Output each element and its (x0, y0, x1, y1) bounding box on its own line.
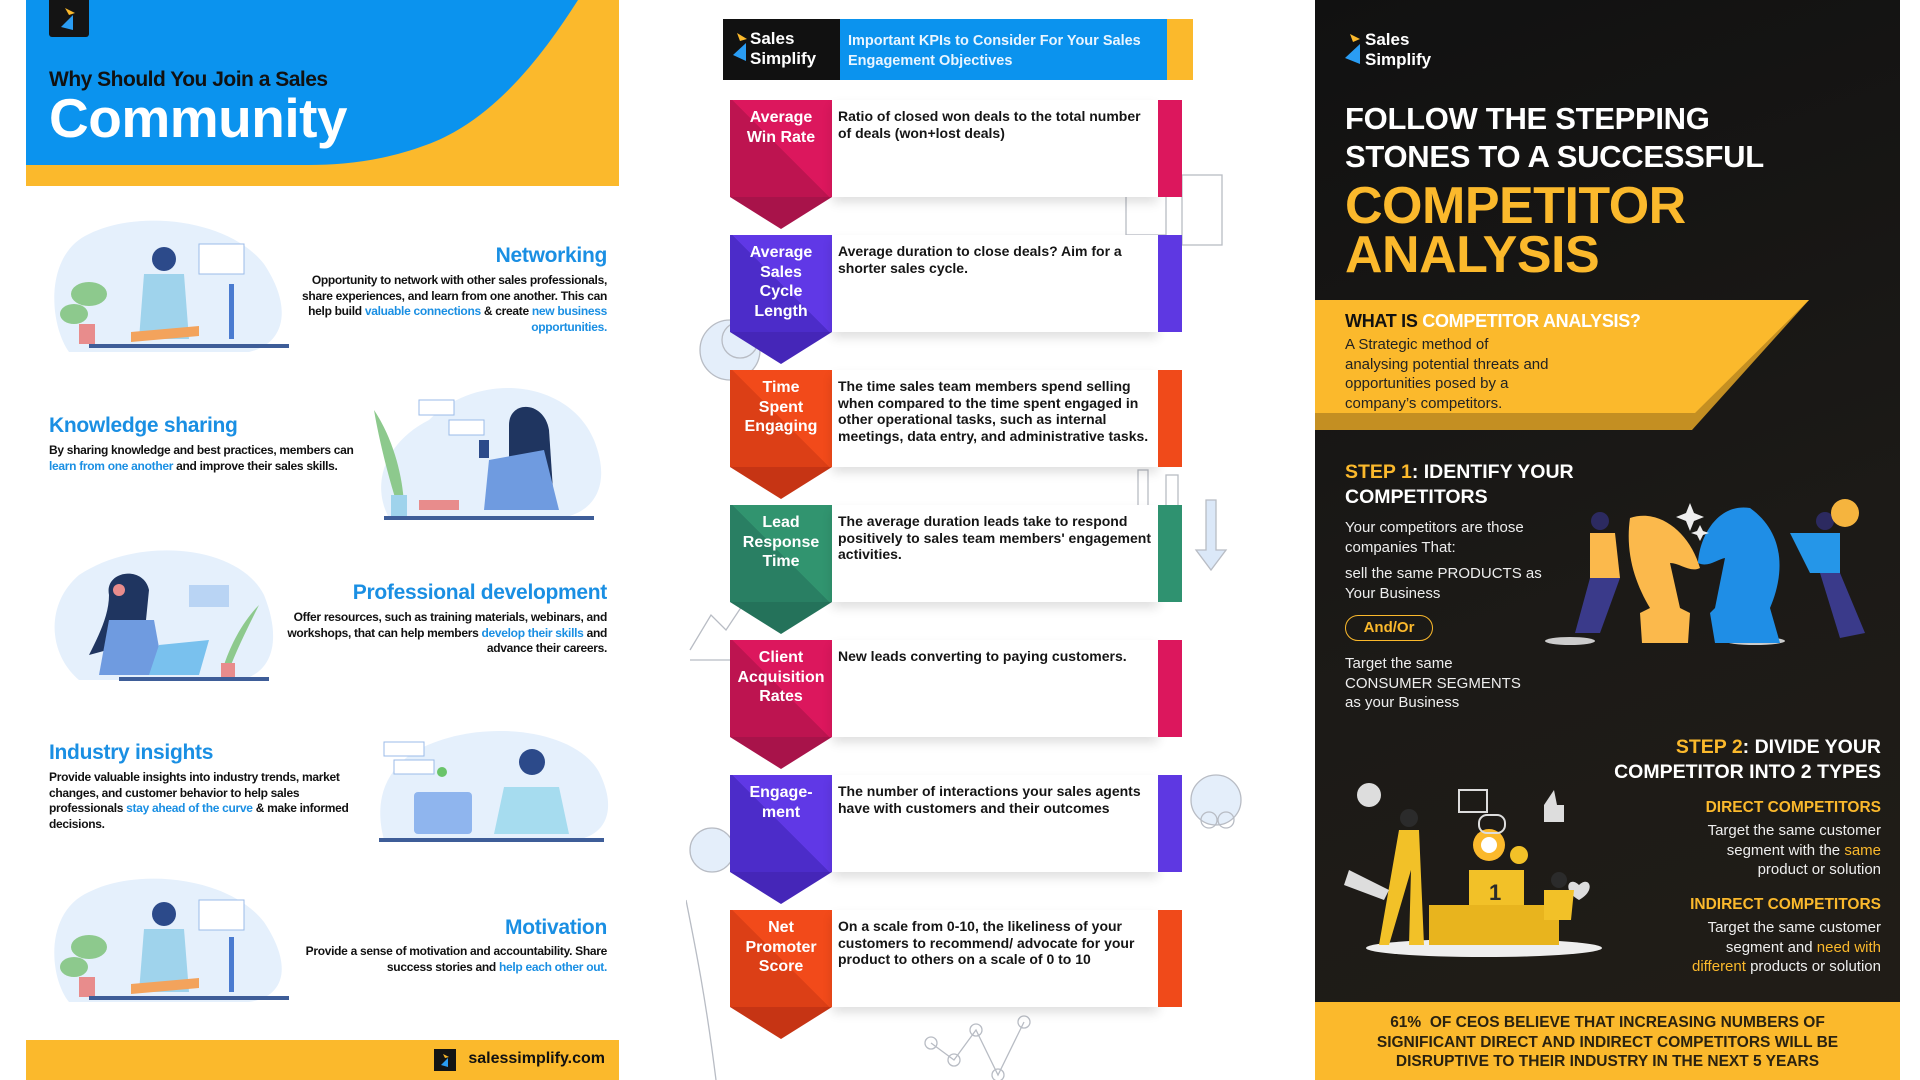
card: average win rate (730, 100, 1182, 229)
card: lead response time: Lead (762, 514, 800, 531)
illustration: man at monitor (379, 731, 608, 842)
logo (1345, 30, 1431, 69)
card: client acquisition rates: Acquisition (737, 668, 825, 686)
step 1 text: sell the same PRODUCTS as (1345, 565, 1542, 582)
illustration: woman with phone (374, 388, 602, 520)
step 1 text: companies That: (1345, 538, 1456, 556)
step 1 heading (1345, 461, 1574, 508)
card: average win rate: Average (750, 109, 812, 126)
background line art (686, 174, 1242, 1080)
logo block: Simplify (750, 49, 816, 68)
title: Motivation (505, 916, 607, 939)
footer (26, 1040, 619, 1080)
card: average sales cycle length: Average duration to close deals? Aim for a shorter sales cycle. (838, 243, 1122, 276)
title: Community (49, 87, 347, 149)
step 1 heading: COMPETITORS (1345, 486, 1488, 508)
title (1345, 101, 1764, 284)
direct competitors: segment with the same (1727, 842, 1881, 858)
card: net promoter score: Net (768, 919, 794, 936)
indirect competitors: segment and need with (1726, 938, 1881, 956)
section: knowledge sharing (49, 388, 602, 520)
card: average sales cycle length: Average (750, 244, 812, 261)
footer url: salessimplify.com (468, 1050, 605, 1067)
header banner (26, 0, 619, 186)
direct competitors: DIRECT COMPETITORS (1706, 799, 1881, 816)
logo: Simplify (1365, 50, 1431, 69)
card: average win rate: Ratio of closed won deals to the total number of deals (won+lost deals) (838, 108, 1141, 140)
definition band (1315, 300, 1809, 430)
step 1 text 2 (1345, 655, 1521, 711)
title: Networking: Networking (496, 244, 607, 267)
and/or pill: And/Or (1364, 619, 1414, 636)
card: average win rate: Win Rate (747, 128, 815, 146)
title: Why Should You Join a Sales (49, 68, 328, 91)
section: professional development (54, 550, 607, 681)
section: networking (54, 220, 607, 352)
step 2 heading: STEP 2: DIVIDE YOUR (1676, 736, 1881, 758)
illustration: podium (1344, 783, 1602, 957)
title: Industry insights (49, 741, 213, 764)
title: FOLLOW THE STEPPING (1345, 101, 1710, 136)
definition text: A Strategic method of analysing potential threats and opportunities posed by a company’s competitors. (1345, 336, 1548, 412)
card: client acquisition rates: New leads converting to paying customers. (838, 648, 1127, 664)
illustration: podium: 1 (1489, 880, 1501, 905)
body text: Offer resources, such as training materials, webinars, and workshops, that can help members develop their skills and advance their careers. (287, 610, 607, 655)
direct competitors: product or solution (1758, 861, 1881, 878)
card: client acquisition rates: Client (759, 649, 803, 666)
card: engagement (730, 775, 1182, 904)
title: ANALYSIS (1345, 226, 1599, 284)
title: Knowledge sharing (49, 414, 238, 437)
and/or pill (1345, 615, 1433, 641)
direct competitors (1706, 799, 1881, 878)
body text: Provide valuable insights into industry trends, market changes, and customer behavior to help sales professionals stay ahead of the curve & make informed decisions. (49, 770, 349, 830)
footer logo (434, 1049, 456, 1071)
banner title: Important KPIs to Consider For Your Sales Engagement Objectives (848, 33, 1141, 69)
step 1 heading: STEP 1: IDENTIFY YOUR (1345, 461, 1574, 483)
step 1 text (1345, 519, 1542, 602)
title: STONES TO A SUCCESSFUL (1345, 139, 1764, 174)
panel: right competitor analysis (1315, 0, 1900, 1080)
card: time spent engaging (730, 370, 1182, 499)
body text: Opportunity to network with other sales professionals, share experiences, and learn from one another. This can help build valuable connections & create new business opportunities. (302, 273, 607, 334)
illustration: man at desk (54, 878, 289, 1002)
step 1 text: Your competitors are those (1345, 519, 1524, 536)
illustration: man at desk (54, 220, 289, 352)
step 1 text 2: as your Business (1345, 694, 1459, 711)
card: engagement: The number of interactions your sales agents have with customers and their outcomes (838, 783, 1141, 816)
panel: left community (26, 0, 619, 1080)
card: lead response time: The average duration leads take to respond positively to sales team members' engagement activities. (838, 513, 1151, 562)
section: industry insights (49, 731, 608, 842)
card: time spent engaging: Spent (759, 398, 803, 416)
banner title (840, 19, 1167, 80)
title: COMPETITOR (1345, 177, 1686, 235)
illustration: woman with headset (54, 550, 273, 681)
logo (49, 0, 89, 37)
card: average sales cycle length: Sales (760, 264, 802, 280)
card: average sales cycle length: Length (754, 302, 808, 320)
step 1 text 2: CONSUMER SEGMENTS (1345, 674, 1521, 692)
header: KPI banner (723, 19, 1193, 80)
card: net promoter score: On a scale from 0-10, the likeliness of your customers to recommend/ advocate for your product to others on a scale of 0 to 10 (838, 918, 1134, 967)
heading: WHAT IS COMPETITOR ANALYSIS? (1345, 311, 1641, 331)
card: client acquisition rates: Rates (759, 688, 803, 705)
logo: Sales (1365, 30, 1409, 49)
card: lead response time: Response (743, 534, 819, 550)
card: time spent engaging: The time sales team members spend selling when compared to the time spent engaged in other operational tasks, such as internal meetings, data entry, and administrative tasks. (838, 378, 1148, 444)
card: average sales cycle length: Cycle (760, 283, 802, 300)
indirect competitors: INDIRECT COMPETITORS (1690, 896, 1881, 913)
step 2 heading (1614, 736, 1881, 783)
step 1 text 2: Target the same (1345, 655, 1453, 672)
card: time spent engaging: Engaging (745, 418, 817, 435)
card: client acquisition rates (730, 640, 1182, 769)
stat band: SIGNIFICANT DIRECT AND INDIRECT COMPETITORS WILL BE (1377, 1034, 1838, 1050)
card: net promoter score: Promoter (745, 938, 817, 956)
indirect competitors: different products or solution (1692, 958, 1881, 975)
body text: Provide a sense of motivation and accountability. Share success stories and help each other out. (306, 944, 607, 974)
indirect competitors: Target the same customer (1708, 919, 1881, 936)
step 2 heading: COMPETITOR INTO 2 TYPES (1614, 761, 1881, 783)
section: motivation (54, 878, 607, 1002)
logo block (723, 19, 840, 80)
illustration: chess knights (1545, 499, 1865, 645)
indirect competitors (1690, 896, 1881, 975)
stat band: DISRUPTIVE TO THEIR INDUSTRY IN THE NEXT 5 YEARS (1396, 1053, 1819, 1070)
card: average sales cycle length (730, 235, 1182, 364)
title: Professional development (353, 581, 607, 604)
card: engagement: Engage- (749, 784, 813, 801)
step 1 text: Your Business (1345, 584, 1440, 602)
card: net promoter score (730, 910, 1182, 1039)
card: lead response time: Time (762, 553, 800, 570)
stat band (1315, 1002, 1900, 1080)
panel: middle KPIs (686, 174, 1242, 1080)
card: engagement: ment (762, 804, 800, 820)
logo block: Sales (750, 29, 794, 48)
card: net promoter score: Score (759, 958, 803, 975)
body text: By sharing knowledge and best practices, members can learn from one another and improve their sales skills. (49, 443, 354, 472)
card: lead response time (730, 505, 1182, 634)
stat band: 61% OF CEOS BELIEVE THAT INCREASING NUMBERS OF (1390, 1014, 1825, 1031)
direct competitors: Target the same customer (1708, 822, 1881, 839)
card: time spent engaging: Time (762, 379, 800, 396)
